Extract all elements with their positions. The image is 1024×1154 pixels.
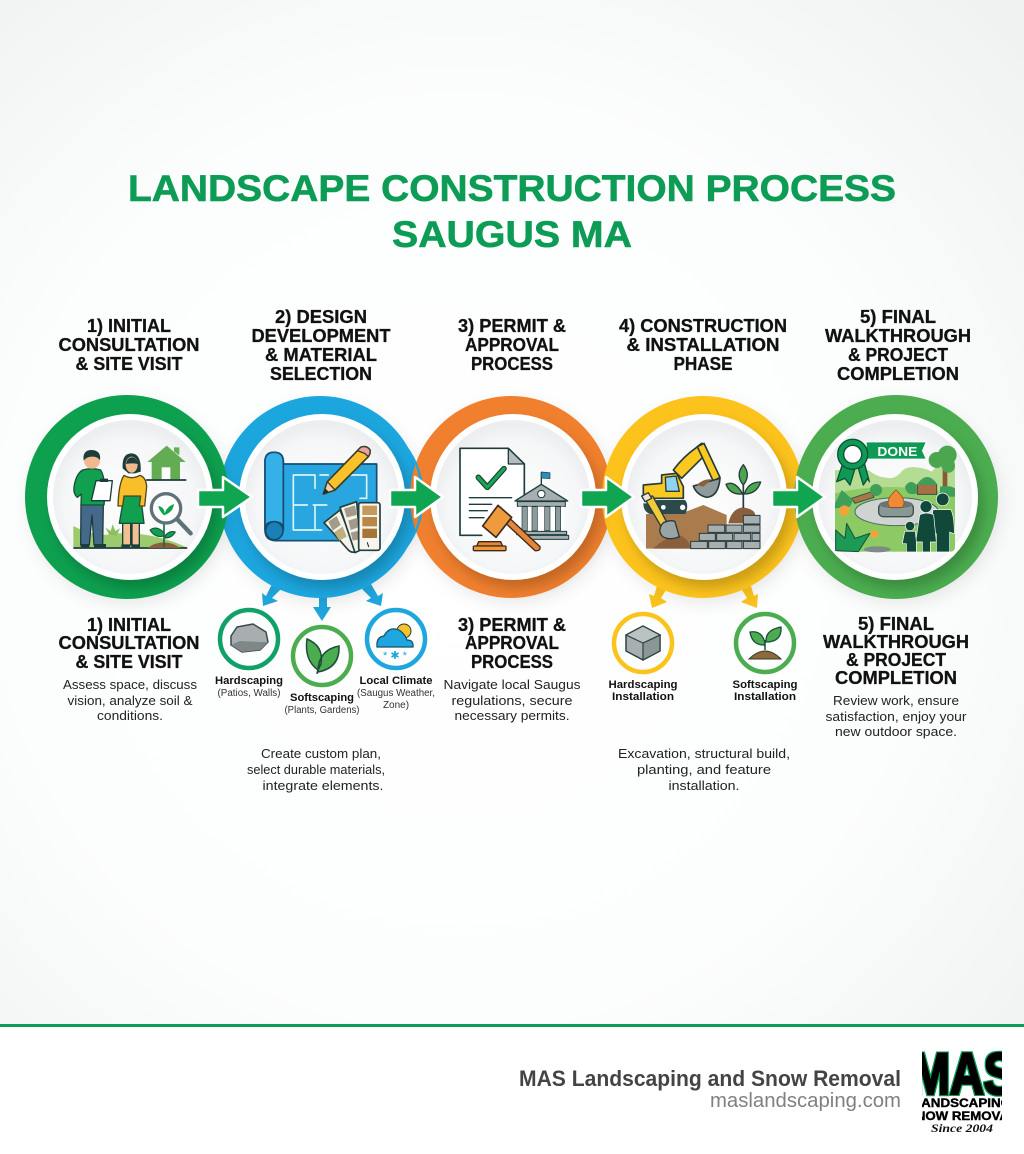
- arrow: step 2 to 3: [390, 477, 443, 517]
- heading: step 4: 4) CONSTRUCTION: [619, 316, 787, 336]
- text: step 5 details: new outdoor space.: [835, 724, 957, 739]
- text: step 4 description: installation.: [668, 778, 740, 793]
- sub-item: softscaping: [284, 627, 360, 716]
- ring: step 3 orange: [410, 396, 612, 598]
- text: step 2 description: select durable materials,: [247, 762, 385, 777]
- disk: step 1: [47, 414, 213, 580]
- ring: step 2 blue overlap: [407, 446, 424, 548]
- sub-item: softscaping installation: Installation: [734, 691, 796, 703]
- text: step 5 details: COMPLETION: [835, 668, 957, 688]
- arrow: step 3 to 4: [581, 477, 634, 517]
- text: step 1 details: vision, analyze soil &: [68, 693, 193, 708]
- sub-item: softscaping installation: [732, 614, 798, 703]
- arrow: step 1 to 2: [198, 477, 252, 517]
- heading: step 5: COMPLETION: [837, 364, 959, 384]
- logo: [922, 1050, 1002, 1132]
- footer company name: MAS Landscaping and Snow Removal: [519, 1066, 901, 1091]
- heading: step 4: [619, 316, 787, 374]
- text: step 3 details: Navigate local Saugus: [444, 677, 581, 692]
- sub-item: hardscaping installation: Installation: [612, 691, 674, 703]
- text: step 2 description: Create custom plan,: [261, 746, 381, 761]
- heading: step 5: 5) FINAL: [860, 307, 936, 327]
- sub-item: local climate: (Saugus Weather,: [357, 688, 435, 699]
- heading: step 3: [458, 316, 566, 374]
- icon: excavator, shovel, bricks and sapling: [642, 443, 761, 549]
- text: step 1 details: 1) INITIAL: [87, 615, 171, 635]
- sub-item: local climate: Zone): [383, 700, 409, 711]
- text: step 3 details: APPROVAL: [465, 633, 559, 653]
- ring: step 2 blue: [219, 396, 421, 598]
- text: step 1 details: & SITE VISIT: [76, 652, 182, 672]
- text: step 5 details: Review work, ensure: [833, 693, 959, 708]
- icon: finished garden with DONE banner and family: [835, 439, 957, 552]
- arrows: blue branches: [262, 584, 383, 621]
- disk: step 3: [430, 414, 596, 580]
- text: step 5 details: satisfaction, enjoy your: [826, 709, 967, 724]
- heading: step 2: [252, 307, 391, 384]
- heading: step 5: WALKTHROUGH: [825, 326, 971, 346]
- heading: step 2: & MATERIAL: [265, 345, 377, 365]
- icon: blueprint, pencil and swatches: [265, 447, 380, 553]
- disk: step 5: [812, 414, 978, 580]
- sub-item: hardscaping: [215, 610, 283, 699]
- sub-item: local climate: Local Climate: [360, 675, 432, 687]
- arrows: yellow branches: [649, 586, 758, 608]
- icon: finished garden with DONE banner and family: DONE: [877, 444, 917, 459]
- text: step 3 details: regulations, secure: [452, 693, 572, 708]
- disk: step 4: [621, 414, 787, 580]
- logo: Since 2004: [931, 1121, 993, 1135]
- heading: step 4: & INSTALLATION: [626, 335, 780, 355]
- text: step 3 details: [444, 615, 581, 723]
- text: step 4 description: planting, and feature: [637, 762, 771, 777]
- text: step 5 details: [823, 614, 969, 739]
- text: step 5 details: WALKTHROUGH: [823, 632, 969, 652]
- ring: step 1 green: [25, 395, 229, 599]
- ring: step 4 yellow: [602, 396, 804, 598]
- heading: step 1: [58, 316, 200, 374]
- sub-item: hardscaping: Hardscaping: [215, 675, 283, 687]
- text: step 5 details: 5) FINAL: [858, 614, 934, 634]
- heading: step 1: CONSULTATION: [58, 335, 200, 355]
- text: step 2 description: integrate elements.: [262, 778, 384, 793]
- heading: step 2: DEVELOPMENT: [252, 326, 391, 346]
- title: [128, 168, 896, 255]
- disk: step 2: [239, 414, 405, 580]
- text: step 3 details: necessary permits.: [454, 708, 570, 723]
- text: step 3 details: 3) PERMIT &: [458, 615, 566, 635]
- logo: LANDSCAPING: [913, 1096, 1011, 1110]
- title: SAUGUS MA: [392, 214, 632, 255]
- heading: step 2: 2) DESIGN: [275, 307, 367, 327]
- heading: step 4: PHASE: [674, 354, 732, 374]
- footer website: maslandscaping.com: [710, 1090, 901, 1112]
- sub-item: local climate: [357, 610, 435, 711]
- text: step 5 details: & PROJECT: [846, 650, 946, 670]
- ring: step 5 green: [794, 395, 998, 599]
- sub-item: hardscaping installation: Hardscaping: [608, 679, 678, 691]
- heading: step 3: PROCESS: [471, 354, 553, 374]
- heading: step 3: 3) PERMIT &: [458, 316, 566, 336]
- sub-item: softscaping installation: Softscaping: [732, 679, 798, 691]
- heading: step 3: APPROVAL: [465, 335, 559, 355]
- text: step 1 details: conditions.: [97, 708, 163, 723]
- icon: permit document, gavel and town hall: [460, 448, 569, 551]
- heading: step 1: & SITE VISIT: [76, 354, 182, 374]
- sub-item: softscaping: Softscaping: [290, 692, 354, 704]
- text: step 2 description: [247, 746, 385, 793]
- text: step 4 description: Excavation, structural build,: [618, 746, 790, 761]
- arrow: step 4 to 5: [772, 477, 825, 517]
- sub-item: hardscaping: (Patios, Walls): [218, 688, 280, 699]
- title: LANDSCAPE CONSTRUCTION PROCESS: [128, 168, 896, 209]
- heading: step 1: 1) INITIAL: [87, 316, 171, 336]
- sub-item: hardscaping installation: [608, 614, 678, 703]
- sub-item: softscaping: (Plants, Gardens): [284, 705, 360, 716]
- text: step 4 description: [618, 746, 790, 793]
- text: step 1 details: CONSULTATION: [58, 633, 200, 653]
- text: step 3 details: PROCESS: [471, 652, 553, 672]
- text: step 1 details: Assess space, discuss: [63, 677, 198, 692]
- heading: step 5: & PROJECT: [848, 345, 948, 365]
- heading: step 2: SELECTION: [270, 364, 372, 384]
- text: step 1 details: [58, 615, 200, 723]
- icon: consultation people, house and plant: [73, 446, 191, 548]
- logo: SNOW REMOVAL: [907, 1109, 1017, 1123]
- heading: step 5: [825, 307, 971, 384]
- sub-item: local climate: * ✱ *: [383, 650, 408, 662]
- footer: [0, 1024, 1024, 1132]
